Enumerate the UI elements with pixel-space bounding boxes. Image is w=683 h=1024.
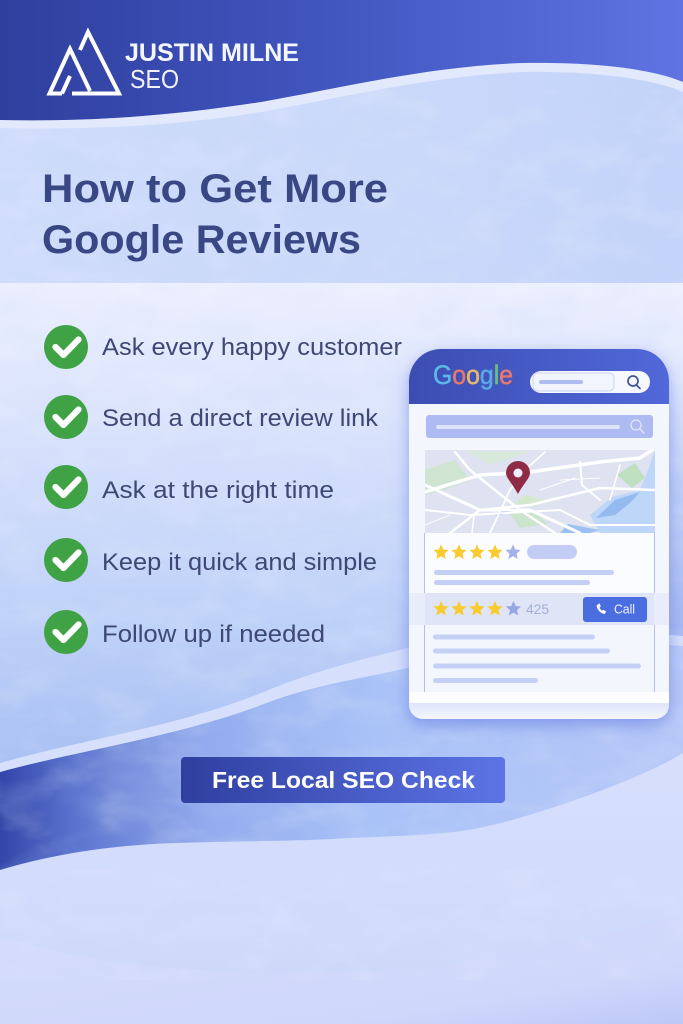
phone base: [409, 692, 669, 719]
background: lower texture: [0, 870, 683, 980]
map: [425, 448, 655, 533]
background: lighter middle panel: [0, 283, 683, 780]
star rating: [433, 544, 521, 559]
icon: mountain logo: [50, 32, 119, 94]
call button: [583, 597, 647, 622]
phone screen outline: [424, 533, 654, 692]
header search box: [530, 371, 650, 393]
item: follow up if needed: [44, 610, 325, 654]
background: bottom inner wave: [0, 913, 683, 1024]
icon: magnifier: [628, 376, 640, 388]
logo: [50, 32, 299, 94]
listing text lines: [433, 634, 641, 683]
phone body: [409, 349, 669, 719]
background: upper textured area: [0, 0, 683, 284]
logo subline: SEO: [130, 66, 179, 94]
background: white wave strip: [0, 631, 683, 772]
icon: phone: [596, 603, 606, 614]
call to action button: Free Local SEO Check: [212, 767, 475, 793]
call to action button: [181, 757, 505, 803]
listing one: [425, 533, 654, 593]
background: lower light wave: [0, 753, 683, 1024]
title: How to Get More: [42, 167, 388, 211]
phone header: [409, 349, 669, 404]
item: send a direct review link: [44, 395, 379, 439]
item: keep it quick and simple: Keep it quick and simple: [102, 549, 377, 576]
title: Google Reviews: [42, 218, 361, 262]
item: ask at the right time: [44, 465, 334, 509]
highlighted listing row: [409, 593, 669, 625]
google logo: Google: [433, 360, 513, 390]
checklist: [44, 325, 402, 654]
item: follow up if needed: Follow up if needed: [102, 621, 325, 648]
item: ask at the right time: Ask at the right time: [102, 477, 334, 504]
search bar: [426, 415, 653, 438]
icon: magnifier light: [631, 420, 644, 433]
phone mockup: [409, 349, 669, 719]
star rating: [433, 601, 521, 616]
review count: 425: [526, 601, 549, 617]
logo wordmark: JUSTIN MILNE: [125, 39, 299, 67]
item: send a direct review link: Send a direct review link: [102, 405, 379, 432]
item: ask every happy customer: [44, 325, 402, 369]
call button: Call: [614, 602, 635, 616]
item: ask every happy customer: Ask every happy customer: [102, 334, 402, 361]
background: lower blue wave band: [0, 644, 683, 880]
item: keep it quick and simple: [44, 538, 377, 582]
icon: map pin: [506, 461, 530, 494]
header band: [0, 0, 683, 128]
title: [42, 167, 388, 262]
